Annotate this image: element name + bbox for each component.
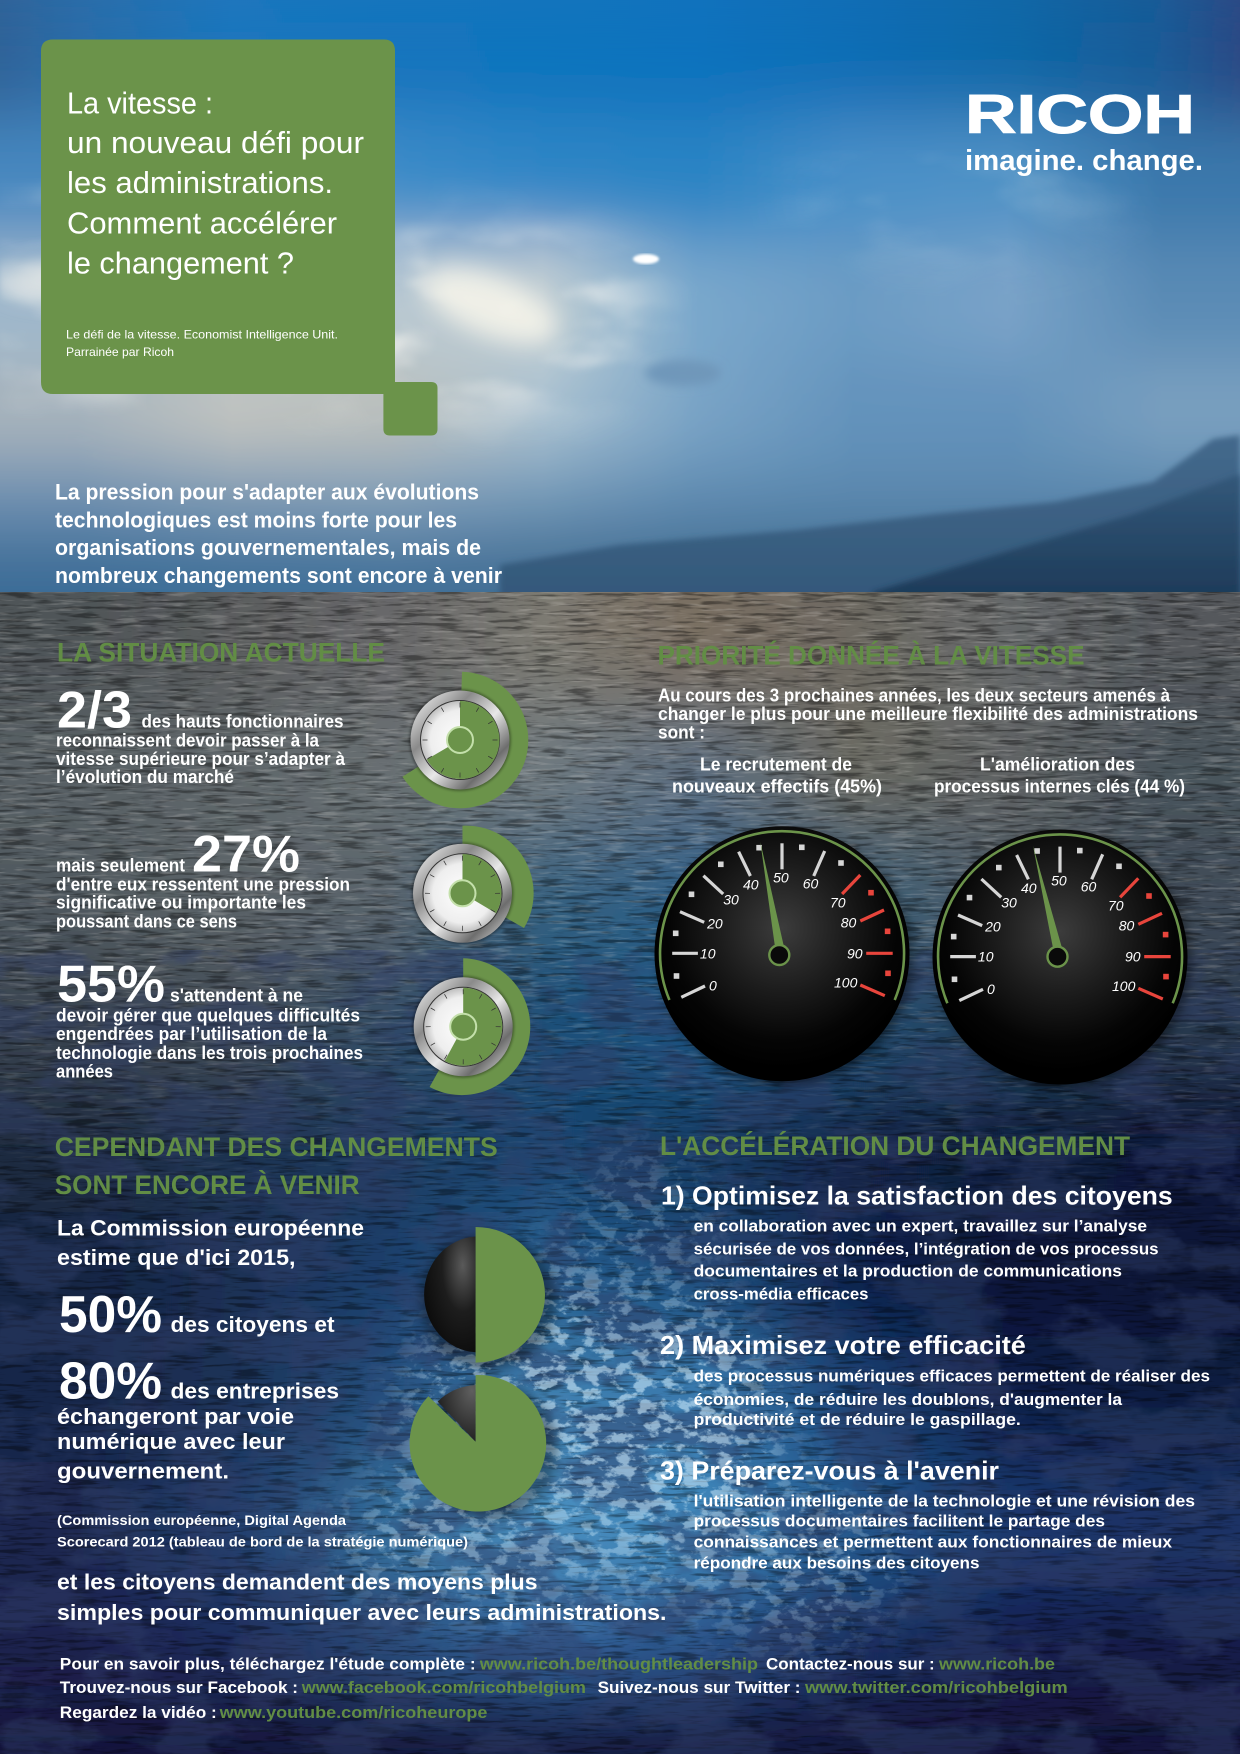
source citation: (Commission européenne, Digital Agenda	[57, 1512, 346, 1528]
stat: 55%: devoir gérer que quelques difficultés	[56, 1006, 360, 1026]
footer links: www.ricoh.be/thoughtleadership	[479, 1654, 758, 1673]
stat: 55%: engendrées par l’utilisation de la	[56, 1024, 328, 1044]
intro text: Au cours des 3 prochaines années, les deux secteurs amenés à	[658, 686, 1171, 706]
speedometer 45 percent: 70	[830, 894, 846, 910]
step 3	[660, 1455, 1195, 1572]
speedometer 44 percent: 100	[1112, 978, 1136, 994]
stat: 55%: s'attendent à ne	[170, 986, 303, 1006]
stat: 50%: 50%	[59, 1286, 162, 1344]
stat: 55%	[56, 956, 363, 1081]
stat: 55%: 55%	[57, 956, 165, 1014]
footer links: Suivez-nous sur Twitter :	[598, 1678, 800, 1697]
footer links: Pour en savoir plus, téléchargez l'étude complète :	[60, 1654, 476, 1673]
speedometer 44 percent: 0	[987, 981, 995, 997]
intro text: changer le plus pour une meilleure flexibilité des administrations	[658, 704, 1198, 724]
label: processus internes 44%	[934, 755, 1185, 797]
footer links: Trouvez-nous sur Facebook :	[60, 1678, 298, 1697]
icon: stopwatch gauge 55 percent	[412, 958, 530, 1095]
speedometer 44 percent: 70	[1108, 898, 1124, 914]
title text	[67, 86, 364, 281]
heading: CEPENDANT DES CHANGEMENTS	[55, 1132, 498, 1162]
step 1	[661, 1180, 1173, 1303]
panel: l'accélération du changement	[660, 1130, 1210, 1572]
speedometer 45 percent: 10	[700, 945, 716, 961]
heading: SONT ENCORE À VENIR	[55, 1169, 360, 1200]
label: processus internes 44%: processus internes clés (44 %)	[934, 777, 1185, 797]
stat: 27%: poussant dans ce sens	[56, 911, 237, 931]
stat: 27%	[56, 826, 350, 931]
speedometer 45 percent: 60	[803, 875, 818, 891]
step 3: connaissances et permettent aux fonctionnaires de mieux	[694, 1533, 1173, 1552]
stat: 80%: échangeront par voie	[57, 1404, 294, 1429]
closing statement: et les citoyens demandent des moyens plus	[57, 1570, 538, 1595]
stat: 80%: des entreprises	[170, 1379, 339, 1404]
speedometer 44 percent: 20	[984, 919, 1001, 935]
speedometer 44 percent: 60	[1081, 879, 1096, 895]
stat: 27%: d'entre eux ressentent une pression	[56, 875, 350, 895]
heading	[55, 1132, 498, 1200]
source note: Parrainée par Ricoh	[66, 345, 174, 359]
stat: 2/3: l’évolution du marché	[56, 767, 234, 787]
intro text: La Commission européenne	[57, 1215, 364, 1240]
speedometer 45 percent: 80	[841, 914, 856, 930]
logo: Ricoh: RICOH	[965, 83, 1195, 145]
stat: 55%: années	[56, 1061, 113, 1081]
source note: Le défi de la vitesse. Economist Intelligence Unit.	[66, 328, 338, 342]
stat: 2/3: 2/3	[57, 682, 132, 740]
intro text	[658, 686, 1198, 742]
label: recrutement 45%: nouveaux effectifs (45%)	[672, 777, 882, 797]
footer links: www.youtube.com/ricoheurope	[219, 1703, 487, 1722]
speedometer 44 percent: 90	[1125, 949, 1141, 965]
step 1: documentaires et la production de communications	[694, 1262, 1122, 1281]
source note	[66, 328, 338, 359]
step 1: sécurisée de vos données, l’intégration de vos processus	[694, 1239, 1159, 1258]
stat: 2/3	[56, 682, 346, 787]
stat: 50%	[59, 1286, 335, 1344]
lead paragraph: La pression pour s'adapter aux évolutions	[55, 479, 479, 504]
title callout panel	[41, 40, 438, 436]
footer links: www.ricoh.be	[938, 1654, 1055, 1673]
footer links: www.twitter.com/ricohbelgium	[804, 1678, 1068, 1697]
lead paragraph: technologiques est moins forte pour les	[55, 507, 457, 532]
title text: un nouveau défi pour	[67, 125, 364, 160]
speedometer 44 percent: 80	[1119, 918, 1134, 934]
icon: stopwatch gauge 27 percent	[412, 826, 534, 944]
panel: la situation actuelle	[56, 638, 534, 1095]
footer links: Regardez la vidéo :	[60, 1703, 217, 1722]
speedometer 45 percent: 30	[723, 891, 739, 907]
step 2: des processus numériques efficaces permettent de réaliser des	[694, 1367, 1210, 1386]
step 3: répondre aux besoins des citoyens	[694, 1553, 980, 1572]
closing statement: simples pour communiquer avec leurs administrations.	[57, 1600, 666, 1625]
stat: 80%	[57, 1353, 339, 1483]
speedometer 44 percent: 30	[1001, 895, 1017, 911]
stat: 27%: 27%	[192, 826, 300, 884]
stat: 27%: mais seulement	[56, 856, 185, 876]
step 3: l'utilisation intelligente de la technologie et une révision des	[694, 1492, 1195, 1511]
source citation	[57, 1512, 468, 1550]
speedometer 45 percent: 40	[743, 877, 759, 893]
lead paragraph	[55, 479, 502, 588]
step 2: productivité et de réduire le gaspillage.	[694, 1410, 1021, 1429]
heading: L'ACCÉLÉRATION DU CHANGEMENT	[660, 1130, 1130, 1161]
callout speech bubble shape	[41, 40, 438, 436]
logo: Ricoh: imagine. change.	[965, 145, 1203, 177]
step 2: 2) Maximisez votre efficacité	[660, 1330, 1026, 1360]
speedometer 45 percent: 90	[847, 945, 863, 961]
logo: Ricoh	[965, 83, 1203, 177]
stat: 2/3: reconnaissent devoir passer à la	[56, 731, 320, 751]
label: recrutement 45%	[672, 755, 882, 797]
intro text: estime que d'ici 2015,	[57, 1245, 296, 1270]
intro text: sont :	[658, 722, 705, 742]
stat: 55%: technologie dans les trois prochaines	[56, 1043, 363, 1063]
step 2	[660, 1330, 1210, 1429]
speedometer 45 percent	[654, 826, 914, 1086]
source citation: Scorecard 2012 (tableau de bord de la stratégie numérique)	[57, 1534, 468, 1550]
lead paragraph: nombreux changements sont encore à venir	[55, 563, 502, 588]
title text: La vitesse :	[67, 86, 213, 121]
speedometer 44 percent: 50	[1051, 873, 1067, 889]
stat: 2/3: des hauts fonctionnaires	[142, 712, 344, 732]
speedometer 44 percent: 10	[978, 949, 994, 965]
step 2: économies, de réduire les doublons, d'augmenter la	[694, 1390, 1123, 1409]
pie chart 80 percent	[410, 1375, 558, 1518]
panel: cependant des changements	[55, 1132, 666, 1625]
speedometer 44 percent	[932, 830, 1192, 1089]
speedometer 45 percent: 50	[773, 869, 789, 885]
closing statement	[57, 1570, 666, 1625]
stat: 80%: numérique avec leur	[57, 1429, 285, 1454]
intro text	[57, 1215, 364, 1270]
stat: 27%: significative ou importante les	[56, 892, 306, 912]
speedometer 45 percent: 0	[709, 978, 717, 994]
pie chart 50 percent	[420, 1227, 556, 1369]
speedometer 45 percent: 100	[834, 975, 858, 991]
step 1: 1) Optimisez la satisfaction des citoyens	[661, 1180, 1173, 1210]
footer links: Contactez-nous sur :	[766, 1654, 935, 1673]
footer links: www.facebook.com/ricohbelgium	[301, 1678, 586, 1697]
stat: 50%: des citoyens et	[170, 1312, 335, 1337]
step 3: processus documentaires facilitent le partage des	[694, 1512, 1105, 1531]
stat: 80%: gouvernement.	[57, 1458, 229, 1483]
speedometer 45 percent: 20	[706, 915, 723, 931]
stat: 2/3: vitesse supérieure pour s’adapter à	[56, 749, 346, 769]
panel: priorité donnée à la vitesse	[654, 639, 1198, 1089]
stat: 80%: 80%	[59, 1353, 162, 1411]
title text: Comment accélérer	[67, 205, 337, 240]
title text: le changement ?	[67, 246, 294, 281]
title text: les administrations.	[67, 165, 333, 200]
lead paragraph: organisations gouvernementales, mais de	[55, 535, 481, 560]
speedometer 44 percent: 40	[1021, 880, 1037, 896]
footer links	[60, 1654, 1068, 1722]
heading: PRIORITÉ DONNÉE À LA VITESSE	[658, 639, 1084, 670]
label: recrutement 45%: Le recrutement de	[700, 755, 852, 775]
step 1: en collaboration avec un expert, travaillez sur l’analyse	[694, 1217, 1147, 1236]
step 1: cross-média efficaces	[694, 1284, 868, 1303]
step 3: 3) Préparez-vous à l'avenir	[660, 1455, 999, 1485]
icon: stopwatch gauge two thirds	[402, 672, 528, 808]
label: processus internes 44%: L'amélioration des	[980, 755, 1135, 775]
heading: LA SITUATION ACTUELLE	[57, 638, 385, 668]
